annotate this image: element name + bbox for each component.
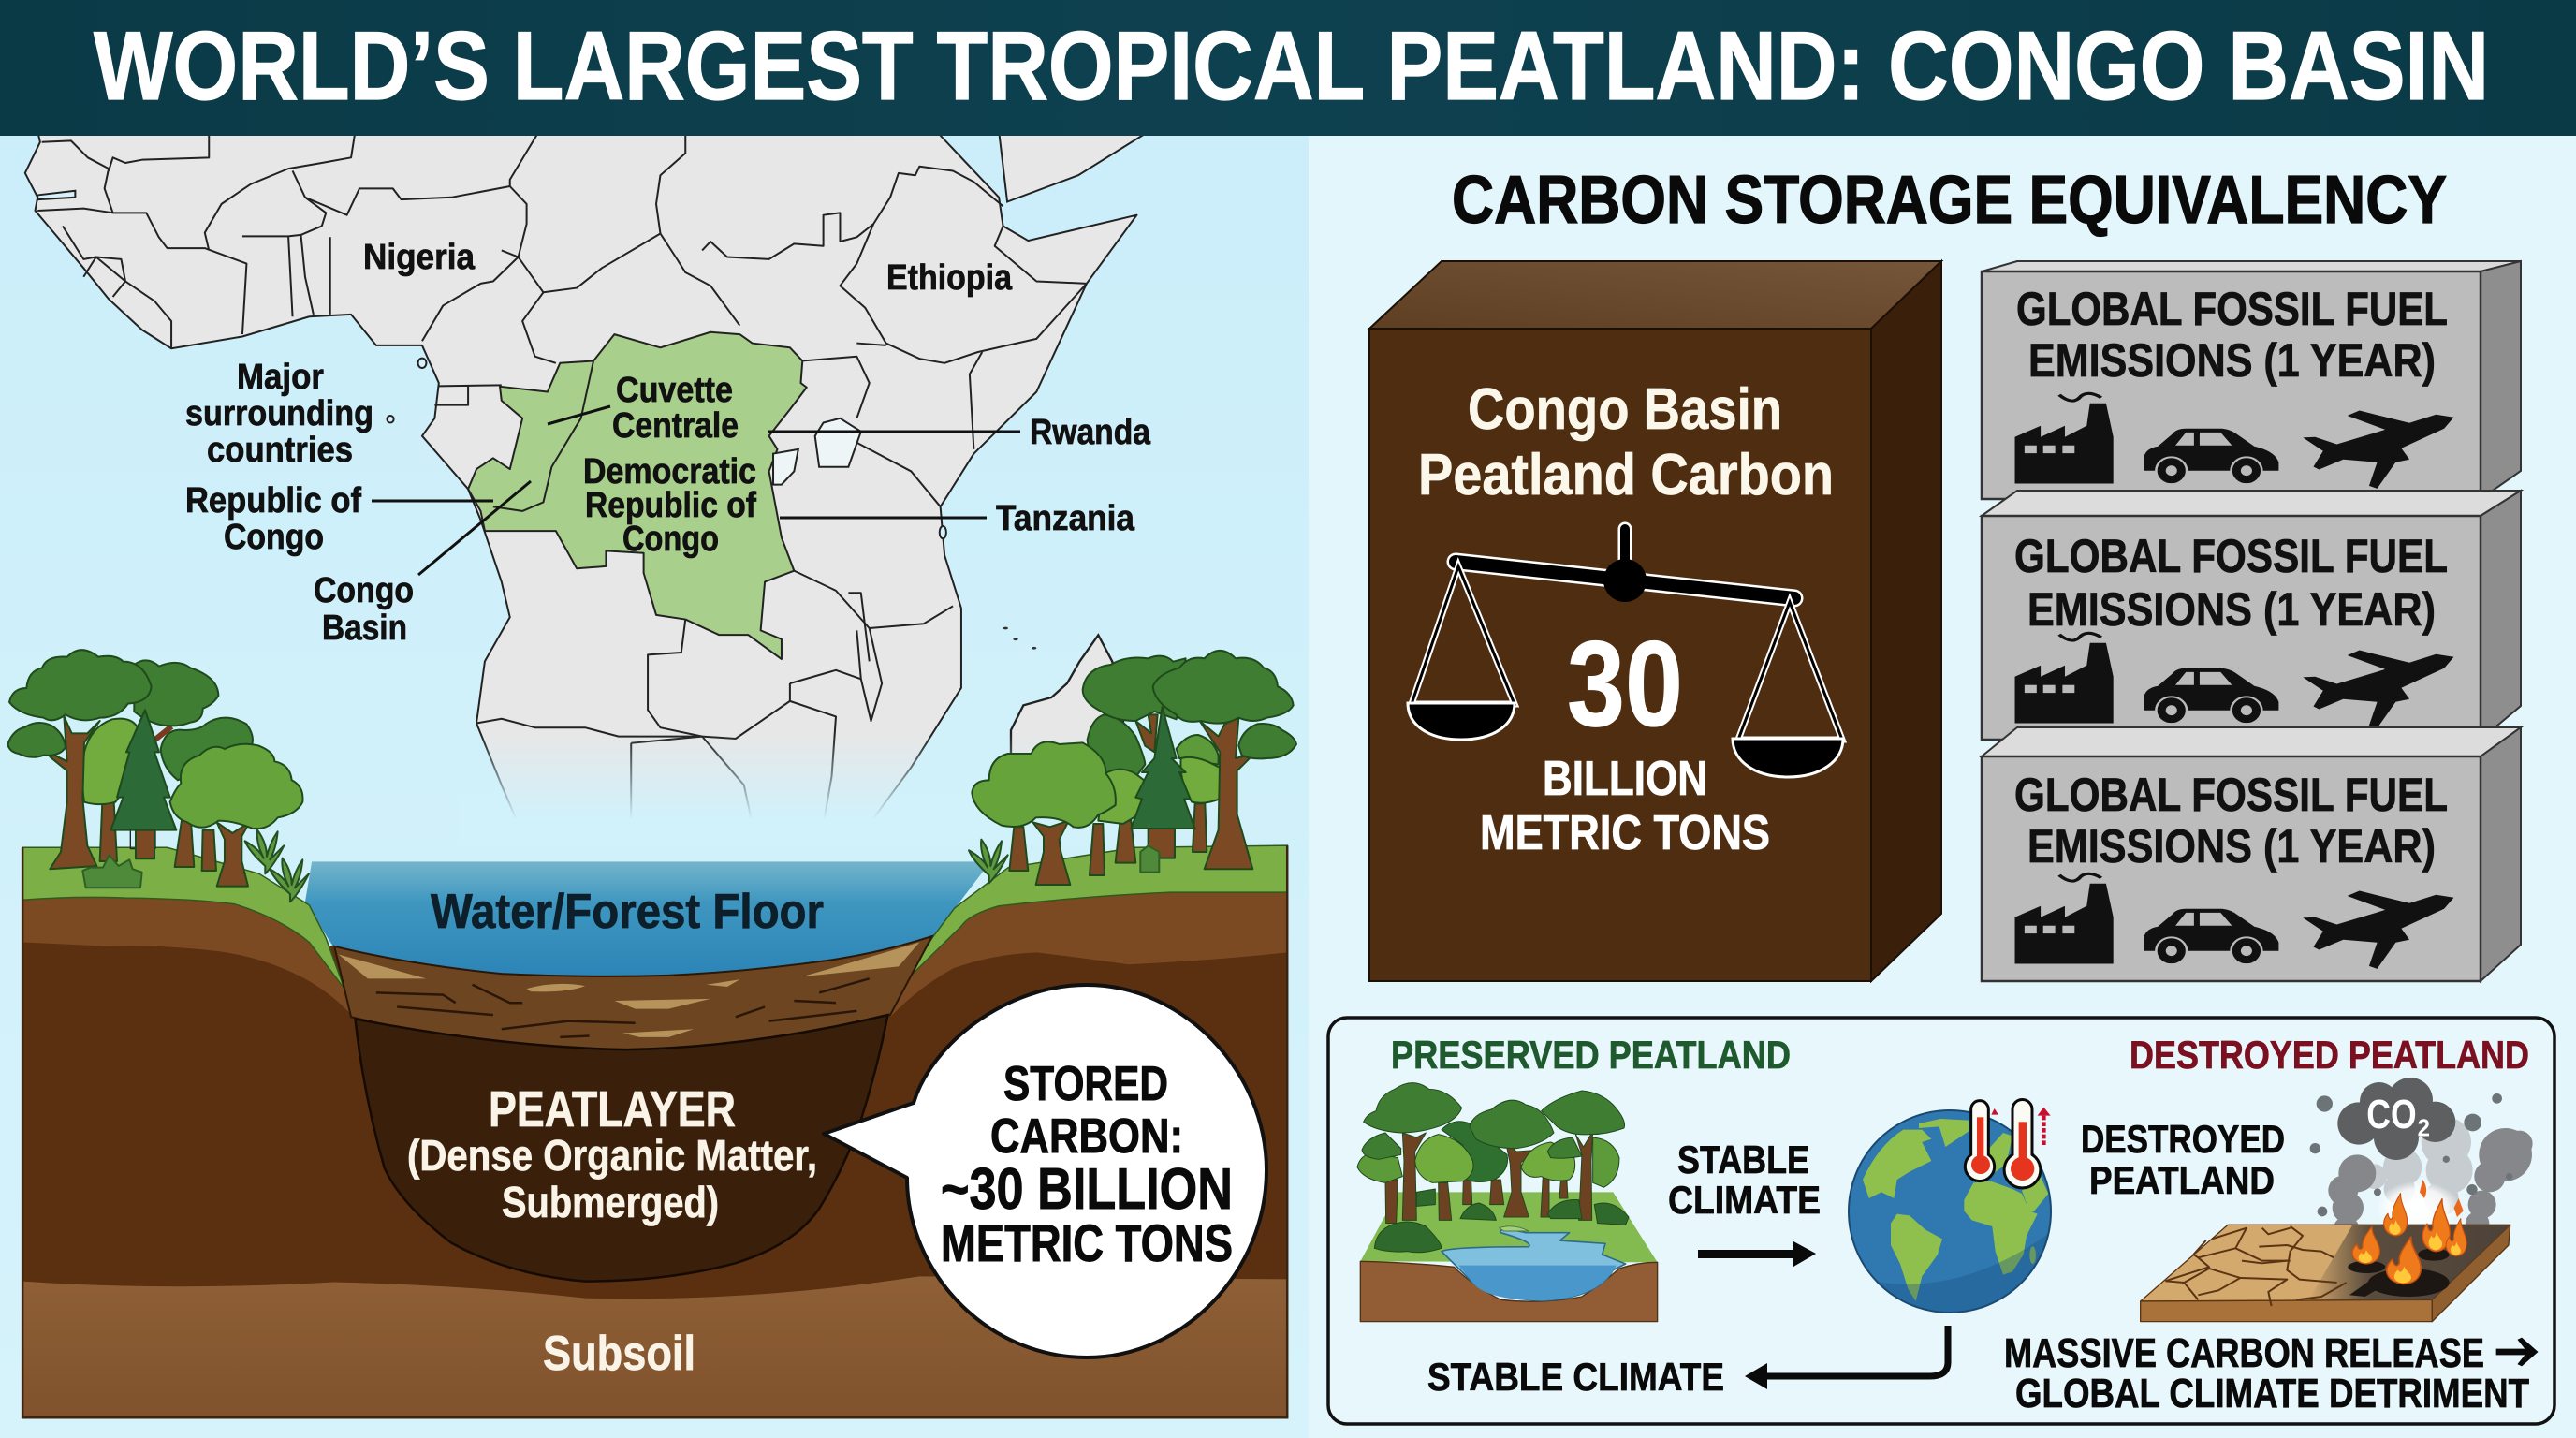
- icon: balance scale: [1408, 529, 1843, 777]
- label: destroyed peatland (middle): PEATLAND: [2089, 1158, 2275, 1202]
- emissions block 2: GLOBAL FOSSIL FUEL: [2014, 530, 2448, 582]
- label: peat layer: (Dense Organic Matter,: [407, 1131, 817, 1180]
- heading: carbon storage equivalency: CARBON STORAGE EQUIVALENCY: [1452, 163, 2447, 238]
- illustration: burning peatland: [2141, 1078, 2533, 1322]
- map labels and leader lines: Centrale: [612, 406, 739, 446]
- brown carbon block: [1369, 261, 1941, 981]
- callout: stored carbon: CARBON:: [990, 1109, 1183, 1164]
- map labels and leader lines: Tanzania: [996, 499, 1135, 538]
- Madagascar: [1011, 635, 1123, 814]
- map labels and leader lines: Congo: [314, 571, 414, 610]
- map labels and leader lines: Republic of: [585, 486, 756, 525]
- arrow: globe to stable climate: [1764, 1326, 1948, 1376]
- map labels and leader lines: Democratic: [583, 452, 756, 492]
- emissions block 1: EMISSIONS (1 YEAR): [2028, 334, 2436, 387]
- map labels and leader lines: Rwanda: [1030, 413, 1151, 452]
- value: 30 billion metric tons: METRIC TONS: [1480, 806, 1770, 860]
- soil layers: [22, 845, 1287, 1417]
- CO2 cloud: [2337, 1078, 2455, 1160]
- map labels and leader lines: Ethiopia: [886, 258, 1013, 298]
- value: 30 billion metric tons: [1480, 615, 1770, 860]
- emissions block 3: EMISSIONS (1 YEAR): [2027, 820, 2436, 873]
- emissions block 1: GLOBAL FOSSIL FUEL: [2016, 283, 2448, 335]
- callout: stored carbon: METRIC TONS: [941, 1213, 1233, 1272]
- emissions block 3: [1982, 727, 2521, 981]
- value: 30 billion metric tons: BILLION: [1543, 752, 1707, 806]
- CO2 cloud: 2: [2418, 1113, 2430, 1141]
- map labels and leader lines: Basin: [322, 609, 407, 648]
- flames: [2352, 1180, 2466, 1284]
- cross-section of peatland: [22, 845, 1287, 1417]
- label: destroyed peatland (middle): [2081, 1117, 2285, 1202]
- map of central Africa: [25, 131, 1149, 846]
- DRC and Republic of Congo highlighted: [468, 332, 807, 659]
- icon: globe with thermometers: [1849, 1099, 2053, 1327]
- block heading: Congo Basin: [1468, 377, 1782, 442]
- map labels and leader lines: [185, 238, 1151, 648]
- right panel background: [1309, 131, 2576, 1438]
- thermometers: [1965, 1099, 2051, 1188]
- emissions block 3: GLOBAL FOSSIL FUEL: [2014, 769, 2448, 821]
- label: peat layer: [407, 1081, 817, 1226]
- label: stable climate (top): [1668, 1137, 1821, 1222]
- left tree cluster: [7, 650, 309, 902]
- label: peat layer: Submerged): [502, 1178, 719, 1226]
- CO2 cloud: CO: [2366, 1092, 2417, 1137]
- label: stable climate (bottom): STABLE CLIMATE: [1427, 1355, 1724, 1399]
- map labels and leader lines: Major: [237, 358, 324, 397]
- label: massive carbon release: [2004, 1330, 2538, 1416]
- map labels and leader lines: surrounding: [185, 394, 373, 433]
- label: stable climate (top): CLIMATE: [1668, 1178, 1821, 1222]
- land and country borders: [25, 131, 1149, 824]
- map labels and leader lines: Republic of: [185, 481, 361, 521]
- map fade: [459, 735, 1133, 819]
- arrowhead: [1745, 1363, 1767, 1389]
- illustration: preserved forest block: [1357, 1083, 1658, 1322]
- cracked ground block: [2141, 1225, 2510, 1322]
- value: 30 billion metric tons: 30: [1567, 615, 1683, 752]
- right tree cluster: [969, 651, 1296, 885]
- panel: preserved vs destroyed peatland: [1328, 1018, 2554, 1424]
- callout: stored carbon: [824, 985, 1266, 1357]
- label: stable climate (top): STABLE: [1677, 1137, 1809, 1181]
- label: massive carbon release: MASSIVE CARBON RELEASE: [2004, 1330, 2484, 1376]
- emissions block 1: [1982, 261, 2521, 499]
- map labels and leader lines: Nigeria: [363, 238, 476, 277]
- heading: preserved peatland: PRESERVED PEATLAND: [1391, 1033, 1791, 1077]
- label: water and forest floor: Water/Forest Floor: [431, 885, 824, 939]
- map labels and leader lines: countries: [207, 431, 353, 470]
- map labels and leader lines: Cuvette: [616, 371, 733, 410]
- label: destroyed peatland (middle): DESTROYED: [2081, 1117, 2285, 1161]
- map labels and leader lines: Congo: [622, 520, 719, 559]
- emissions block 2: [1982, 491, 2521, 740]
- block heading: [1418, 377, 1834, 507]
- block heading: Peatland Carbon: [1418, 443, 1834, 507]
- haze and smoke: [2310, 1093, 2533, 1242]
- callout: stored carbon: STORED: [1003, 1057, 1168, 1111]
- emissions block 2: EMISSIONS (1 YEAR): [2027, 583, 2436, 636]
- left panel background: [0, 131, 1309, 1438]
- map labels and leader lines: Congo: [224, 518, 324, 557]
- arrow: forest to globe: [1698, 1241, 1816, 1267]
- label: peat layer: PEATLAYER: [489, 1081, 736, 1137]
- label: subsoil: Subsoil: [543, 1327, 695, 1381]
- callout: stored carbon: ~30 BILLION: [941, 1157, 1233, 1222]
